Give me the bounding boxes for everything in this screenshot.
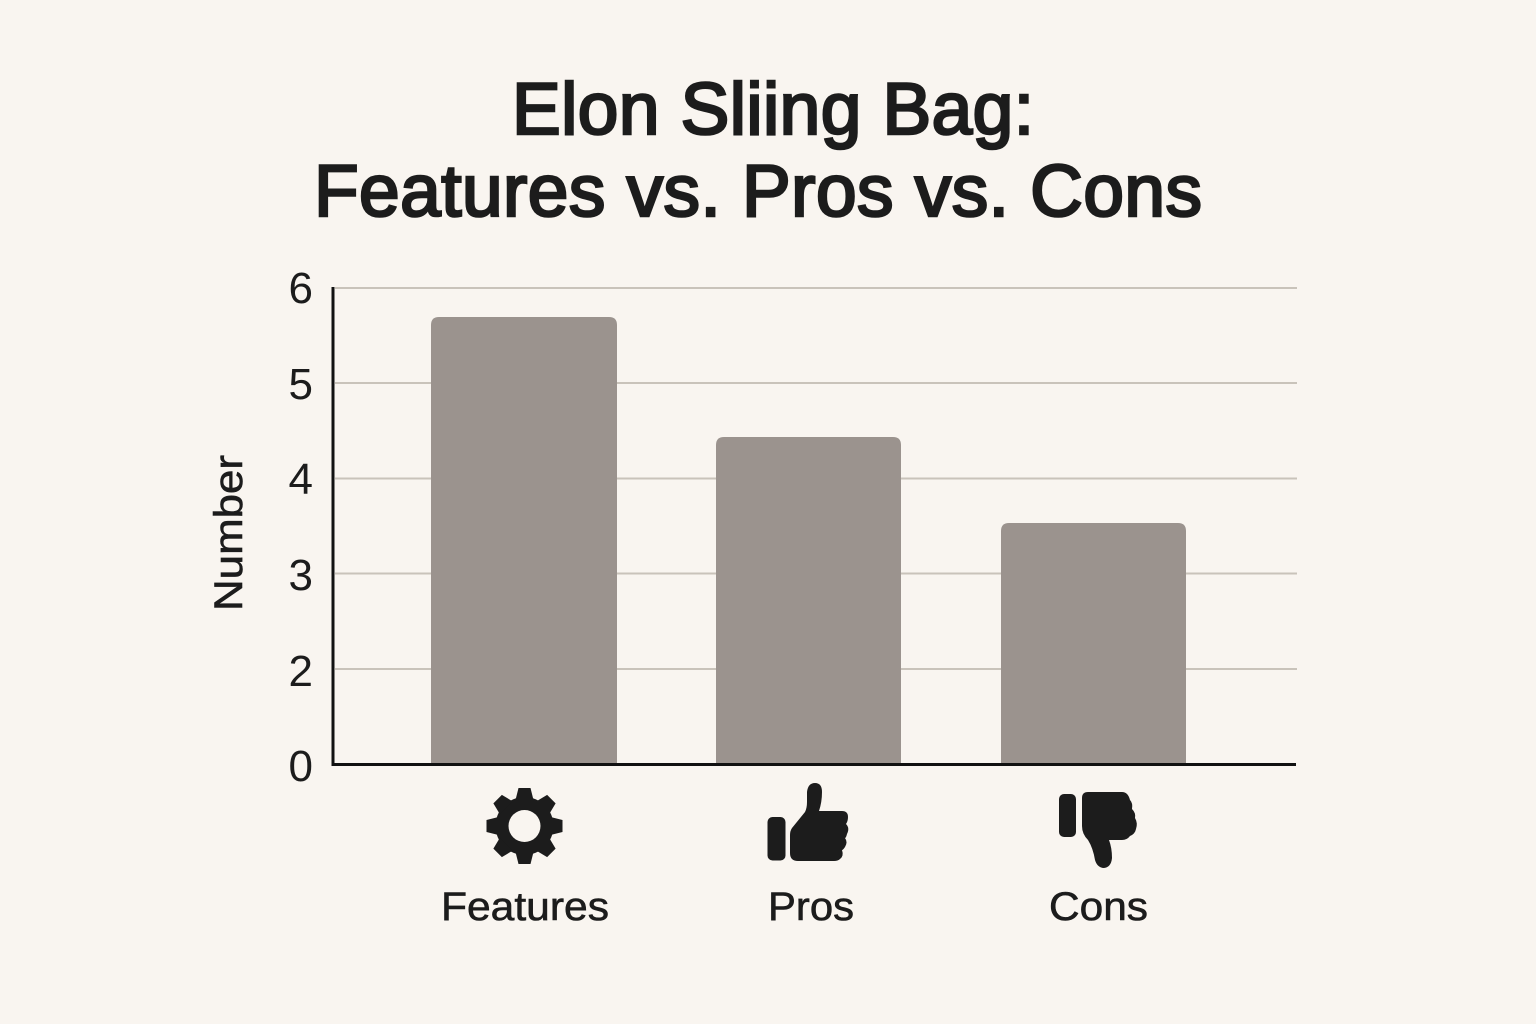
- y-axis tick labels: 6: [289, 264, 313, 313]
- y-axis tick labels: 0: [289, 742, 313, 791]
- category labels: Features: [441, 885, 609, 929]
- category labels: Cons: [1049, 885, 1148, 929]
- category labels: Pros: [768, 885, 854, 929]
- title: Features vs. Pros vs. Cons: [314, 151, 1202, 232]
- bar chart: [207, 264, 1297, 791]
- bar: Pros: [716, 437, 901, 764]
- y-axis title: Number: [207, 455, 251, 611]
- bar: Cons: [1001, 523, 1186, 764]
- y-axis tick labels: [289, 264, 313, 791]
- axes: [333, 287, 1296, 764]
- title: Elon Sliing Bag:: [512, 69, 1034, 150]
- y-axis tick labels: 3: [289, 551, 313, 600]
- icon: thumbs up: [768, 783, 848, 861]
- title: [314, 69, 1202, 232]
- y-axis tick labels: 2: [289, 647, 313, 696]
- category labels: [441, 885, 1148, 929]
- bar: Features: [431, 317, 617, 764]
- y-axis tick labels: 4: [289, 455, 313, 504]
- icon: thumbs down: [1059, 792, 1137, 868]
- icon: gear: [486, 788, 562, 864]
- y-axis tick labels: 5: [289, 360, 313, 409]
